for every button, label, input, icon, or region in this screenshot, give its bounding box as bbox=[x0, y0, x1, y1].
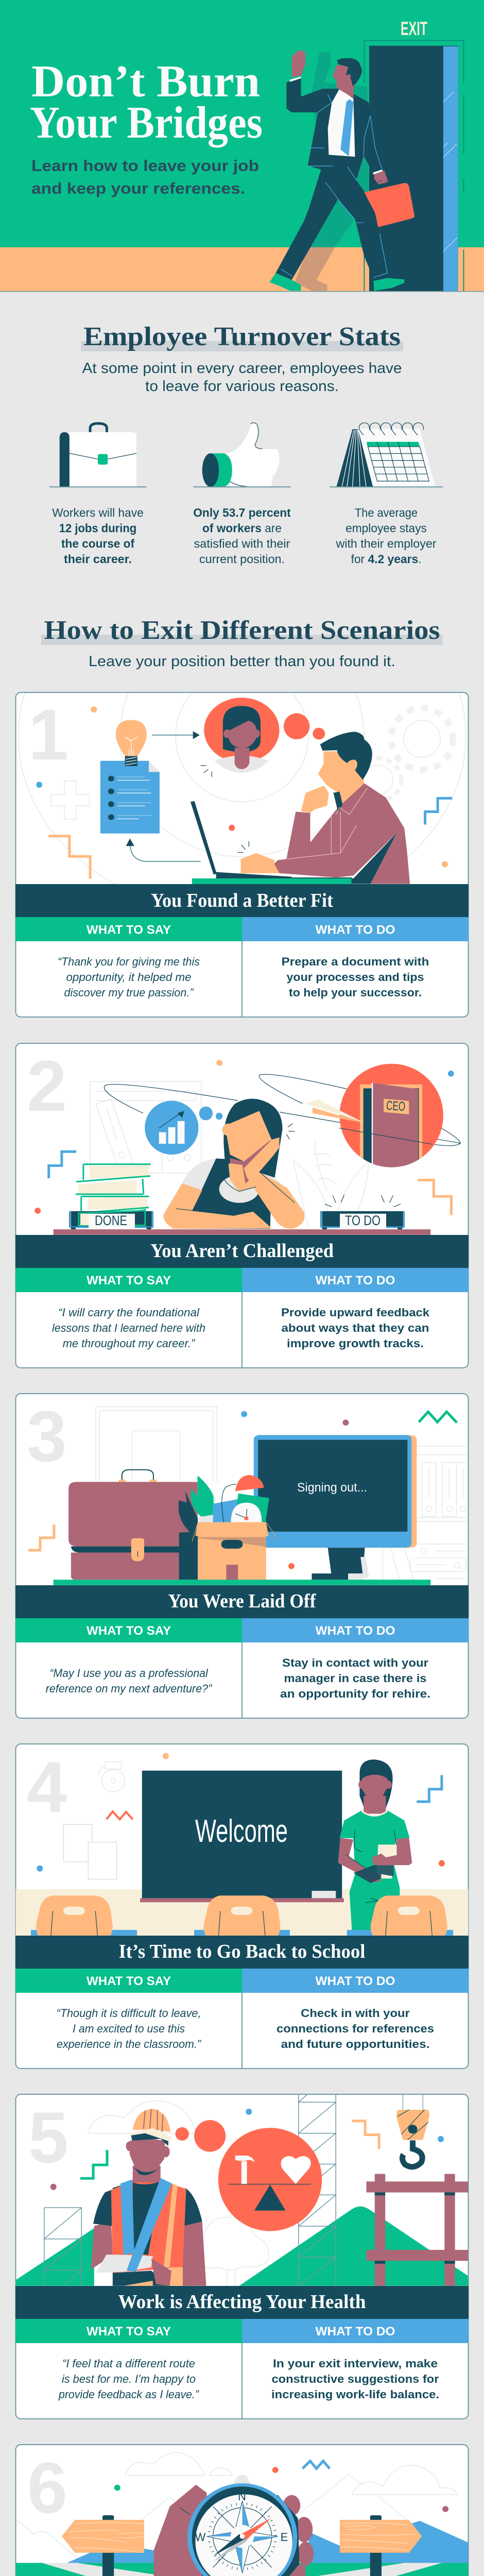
label: CEO: CEO bbox=[386, 1098, 406, 1114]
what to do text: an opportunity for rehire. bbox=[280, 1687, 430, 1700]
desks and chairs bbox=[31, 1930, 137, 1936]
section intro text: to leave for various reasons. bbox=[145, 378, 339, 395]
column headers: WHAT TO DO bbox=[315, 923, 395, 937]
what to say text: me throughout my career.” bbox=[63, 1337, 196, 1350]
stat text: tenure bbox=[335, 506, 437, 566]
person bbox=[274, 783, 410, 884]
big number 6: 6 bbox=[27, 2447, 67, 2528]
what to say text: “I will carry the foundational bbox=[58, 1306, 200, 1319]
what to say text bbox=[52, 1306, 205, 1350]
section intro text: At some point in every career, employees have bbox=[82, 360, 402, 377]
structure bbox=[375, 2174, 385, 2286]
screen text: Signing out... bbox=[297, 1481, 367, 1495]
column headers: WHAT TO SAY bbox=[87, 1274, 171, 1287]
what to do text: Provide upward feedback bbox=[281, 1306, 430, 1319]
panel: scenario 2 bbox=[15, 1043, 469, 1368]
what to do text: and future opportunities. bbox=[281, 2038, 429, 2050]
stat text: jobs: 12 jobs during bbox=[59, 521, 136, 535]
career door bbox=[339, 1064, 443, 1167]
stat text: tenure: The average bbox=[355, 506, 418, 519]
stat text: tenure: employee stays bbox=[345, 521, 427, 535]
what to say text: experience in the classroom.” bbox=[57, 2038, 201, 2050]
panel: scenario 1 bbox=[15, 692, 469, 1018]
what to do text: to help your successor. bbox=[289, 986, 422, 999]
what to do text bbox=[281, 1306, 430, 1350]
hero banner bbox=[0, 0, 484, 292]
what to do text: constructive suggestions for bbox=[272, 2372, 439, 2385]
column headers: WHAT TO DO bbox=[315, 1624, 395, 1638]
jacket bbox=[286, 78, 382, 179]
what to say text: discover my true passion.” bbox=[64, 986, 194, 999]
hero title: Your Bridges bbox=[30, 98, 263, 148]
column headers: WHAT TO SAY bbox=[87, 1624, 171, 1638]
column headers: WHAT TO SAY bbox=[87, 1974, 171, 1988]
illustration: bored woman at desk bbox=[34, 1060, 460, 1235]
scenario title bbox=[15, 1235, 469, 1268]
scenario title bbox=[15, 1936, 469, 1969]
stat text: tenure: for 4.2 years. bbox=[351, 552, 421, 566]
stat text: satisfaction: current position. bbox=[199, 552, 285, 566]
panel: scenario 3 bbox=[15, 1394, 469, 1718]
what to say text: “Though it is difficult to leave, bbox=[57, 2007, 201, 2020]
what to do text: Prepare a document with bbox=[282, 955, 429, 968]
what to do text: In your exit interview, make bbox=[273, 2357, 438, 2370]
column headers bbox=[15, 1969, 469, 1993]
section heading: How to Exit Different Scenarios: How to Exit Different Scenarios bbox=[44, 616, 440, 645]
compass letters: E bbox=[281, 2531, 288, 2544]
scenario title: You Were Laid Off bbox=[168, 1590, 317, 1612]
stat text: tenure: with their employer bbox=[335, 537, 437, 550]
column headers: WHAT TO SAY bbox=[87, 2325, 171, 2338]
what to say text bbox=[46, 1667, 213, 1695]
scenario title: You Found a Better Fit bbox=[151, 890, 333, 911]
scenario title bbox=[15, 1585, 469, 1618]
what to say text bbox=[58, 955, 200, 999]
scenario title bbox=[15, 884, 469, 917]
what to do text: increasing work-life balance. bbox=[271, 2388, 439, 2401]
monitor bbox=[260, 1435, 417, 1548]
compass letters bbox=[195, 2490, 288, 2576]
what to do text: improve growth tracks. bbox=[287, 1337, 424, 1350]
chalkboard text: Welcome bbox=[195, 1814, 288, 1849]
big number 5: 5 bbox=[28, 2097, 68, 2178]
section intro text bbox=[82, 360, 402, 395]
illustration: man walking out of exit door bbox=[269, 40, 463, 291]
what to say text: opportunity, it helped me bbox=[66, 971, 192, 984]
hand bbox=[153, 2484, 306, 2576]
big number 4: 4 bbox=[27, 1747, 67, 1827]
column headers bbox=[15, 917, 469, 941]
what to do text: connections for references bbox=[276, 2022, 434, 2035]
what to do text: your processes and tips bbox=[286, 971, 424, 984]
icon: calendar bbox=[330, 423, 443, 487]
column headers: WHAT TO SAY bbox=[87, 923, 171, 937]
woman bbox=[223, 1099, 283, 1205]
what to say text: “May I use you as a professional bbox=[49, 1667, 209, 1680]
section heading: Employee Turnover Stats: Employee Turnover Stats bbox=[83, 322, 401, 351]
thought bubble bbox=[145, 1101, 198, 1155]
what to do text bbox=[280, 1656, 430, 1700]
stat text: satisfaction: Only 53.7 percent bbox=[193, 506, 291, 519]
what to say text: is best for me. I’m happy to bbox=[62, 2372, 196, 2385]
what to do text: Stay in contact with your bbox=[282, 1656, 428, 1669]
boxes bbox=[69, 1211, 153, 1227]
what to say text: lessons that I learned here with bbox=[52, 1321, 205, 1334]
scenario title: You Aren’t Challenged bbox=[150, 1240, 334, 1262]
section intro text: Leave your position better than you found it. bbox=[89, 653, 395, 670]
stat text: jobs: the course of bbox=[61, 537, 134, 550]
panel: scenario 4 bbox=[15, 1744, 469, 2069]
big number 1: 1 bbox=[28, 694, 68, 775]
panel: scenario 5 bbox=[15, 2094, 469, 2419]
stat text: satisfaction: of workers are bbox=[202, 521, 282, 535]
big number 2: 2 bbox=[27, 1045, 67, 1126]
hero title bbox=[30, 57, 263, 148]
legs bbox=[275, 155, 387, 280]
what to do text: Check in with your bbox=[301, 2007, 410, 2020]
icon: briefcase bbox=[49, 423, 147, 487]
books bbox=[90, 1165, 149, 1179]
compass bbox=[233, 2475, 251, 2484]
compass letters: N bbox=[238, 2490, 246, 2503]
what to say text bbox=[58, 2357, 199, 2401]
hero subtitle bbox=[31, 157, 259, 197]
illustration: injured construction worker bbox=[16, 2095, 469, 2286]
what to say text: reference on my next adventure?” bbox=[46, 1682, 213, 1695]
column headers bbox=[15, 2319, 469, 2343]
hero subtitle: Learn how to leave your job bbox=[31, 157, 259, 175]
column headers bbox=[15, 1618, 469, 1642]
illustration: hand holding compass at crossroads bbox=[16, 2452, 469, 2576]
illustration: person thinking at laptop bbox=[18, 693, 466, 884]
ghost reflection bbox=[312, 52, 369, 199]
what to do text bbox=[276, 2007, 434, 2050]
scenario title: It’s Time to Go Back to School bbox=[118, 1941, 366, 1962]
hero subtitle: and keep your references. bbox=[31, 179, 245, 197]
what to say text: “I feel that a different route bbox=[62, 2357, 195, 2370]
illustration: classroom with teacher bbox=[16, 1753, 468, 1936]
stat text: jobs: their career. bbox=[64, 552, 132, 566]
big number 3: 3 bbox=[27, 1396, 67, 1477]
what to do text bbox=[271, 2357, 439, 2401]
what to do text: manager in case there is bbox=[284, 1672, 426, 1685]
hero title: Don’t Burn bbox=[31, 57, 260, 107]
what to say text: I am excited to use this bbox=[73, 2022, 185, 2035]
what to say text bbox=[57, 2007, 201, 2050]
box contents bbox=[179, 1491, 198, 1580]
scenario title bbox=[15, 2286, 469, 2319]
what to do text: about ways that they can bbox=[281, 1321, 429, 1334]
compass letters: W bbox=[195, 2531, 206, 2544]
illustration: briefcase, box and monitor bbox=[28, 1406, 469, 1585]
teacher bbox=[359, 1759, 393, 1808]
briefcase bbox=[122, 1469, 154, 1480]
scenario title: Work is Affecting Your Health bbox=[118, 2291, 366, 2313]
stat text: satisfaction bbox=[193, 506, 291, 566]
column headers: WHAT TO DO bbox=[315, 2325, 395, 2338]
icon: thumbs up bbox=[193, 423, 291, 487]
column headers: WHAT TO DO bbox=[315, 1274, 395, 1287]
worker bbox=[91, 2222, 113, 2269]
panel: scenario 6 bbox=[15, 2445, 469, 2576]
hook bbox=[403, 2095, 423, 2110]
column headers: WHAT TO DO bbox=[315, 1974, 395, 1988]
stat text: satisfaction: satisfied with their bbox=[194, 537, 290, 550]
stat text: jobs bbox=[52, 506, 144, 566]
box bbox=[198, 1536, 266, 1580]
column headers bbox=[15, 1268, 469, 1292]
label: to do: TO DO bbox=[345, 1213, 381, 1228]
exit sign: EXIT bbox=[401, 18, 427, 39]
stat text: jobs: Workers will have bbox=[52, 506, 144, 519]
what to say text: provide feedback as I leave.” bbox=[58, 2388, 199, 2401]
what to do text bbox=[282, 955, 429, 999]
what to say text: “Thank you for giving me this bbox=[58, 955, 200, 968]
label: done: DONE bbox=[95, 1213, 127, 1228]
